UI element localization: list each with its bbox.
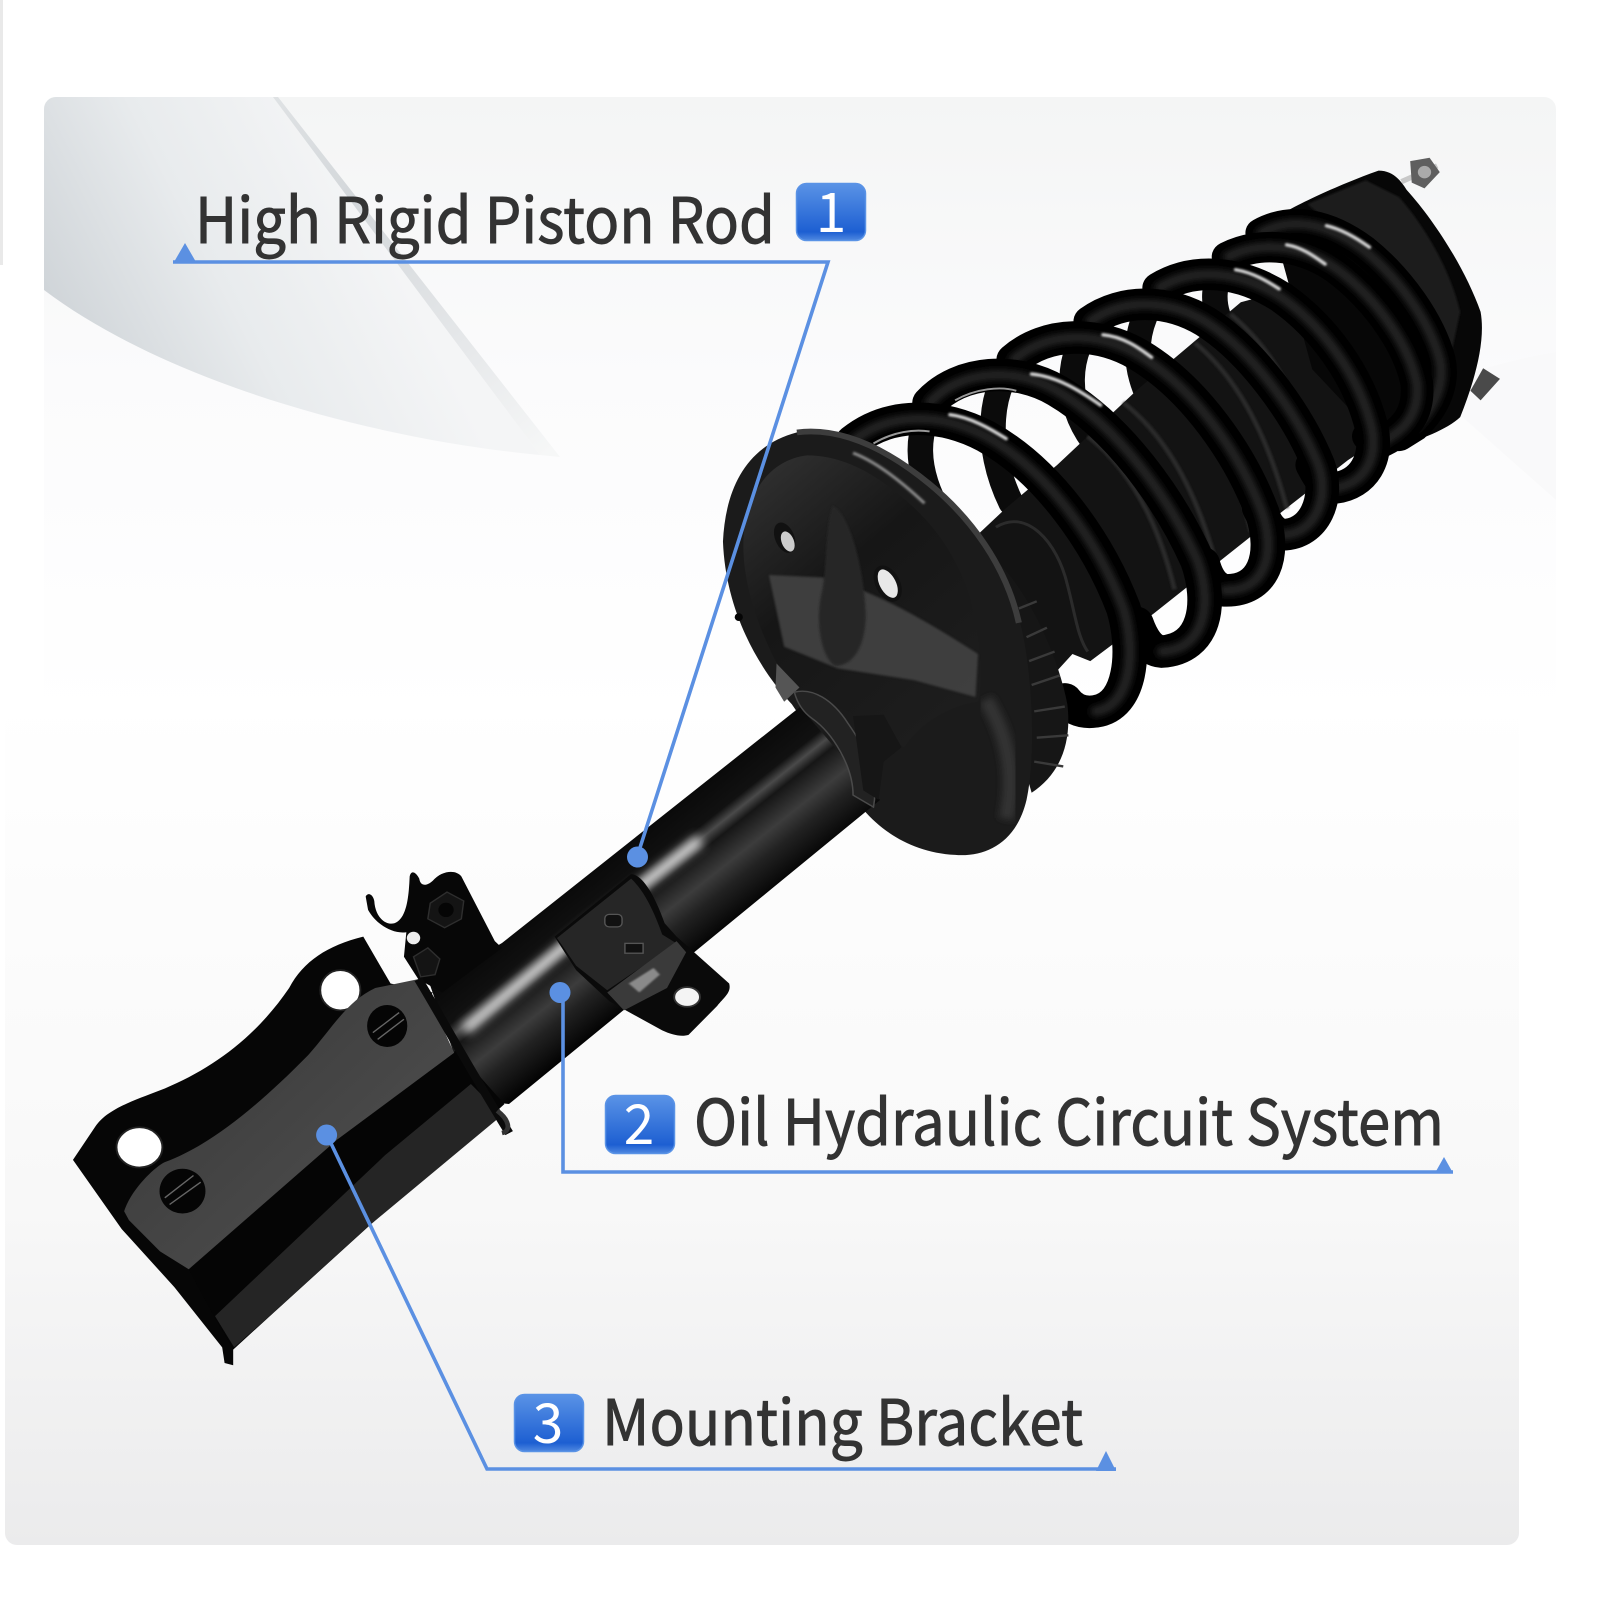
callout 3: Mounting Bracket (316, 1124, 1116, 1471)
anchor dot 1 (627, 846, 648, 868)
panel: lower background (5, 700, 1519, 1545)
rear coil arcs (920, 255, 1233, 522)
tube clamp (555, 874, 730, 1036)
top mount (1271, 158, 1500, 451)
anchor dot 2 (550, 982, 570, 1003)
rubber isolator (998, 563, 1068, 793)
spring seat plate (723, 432, 1032, 855)
decorative right curve (1430, 352, 1556, 500)
badge 2 (606, 1080, 674, 1160)
badge 2: 2 (624, 1080, 654, 1160)
badge 1: 1 (816, 168, 846, 248)
label 1: High Rigid Piston Rod (195, 171, 775, 262)
strut assembly upper section (723, 158, 1500, 855)
badge 1 (796, 168, 866, 248)
arrowhead 1 (174, 243, 196, 262)
main tube (430, 707, 880, 1104)
lower assembly (73, 872, 730, 1365)
decorative wedge (44, 97, 540, 455)
badge 3 (514, 1379, 584, 1459)
anchor dot 3 (316, 1124, 337, 1146)
leader line 1 (173, 262, 828, 857)
panel: upper background (44, 97, 1556, 720)
callout 2: Oil Hydraulic Circuit System (550, 982, 1453, 1173)
arrowhead 3 (1096, 1451, 1116, 1471)
callout 1: High Rigid Piston Rod (173, 168, 866, 868)
dust boot (976, 283, 1414, 671)
decorative streak (273, 97, 560, 457)
spring coils (853, 224, 1441, 712)
lower body (124, 979, 509, 1350)
label 2: Oil Hydraulic Circuit System (694, 1073, 1444, 1164)
tube weld collar (794, 691, 902, 807)
small upper bracket (366, 872, 502, 992)
leader line 3 (327, 1135, 1116, 1469)
badge 3: 3 (533, 1379, 563, 1459)
arrowhead 2 (1435, 1157, 1453, 1173)
leader line 2 (560, 992, 1453, 1172)
rear mounting plate (73, 937, 433, 1365)
label 3: Mounting Bracket (602, 1373, 1083, 1464)
tube highlight (465, 840, 700, 1030)
